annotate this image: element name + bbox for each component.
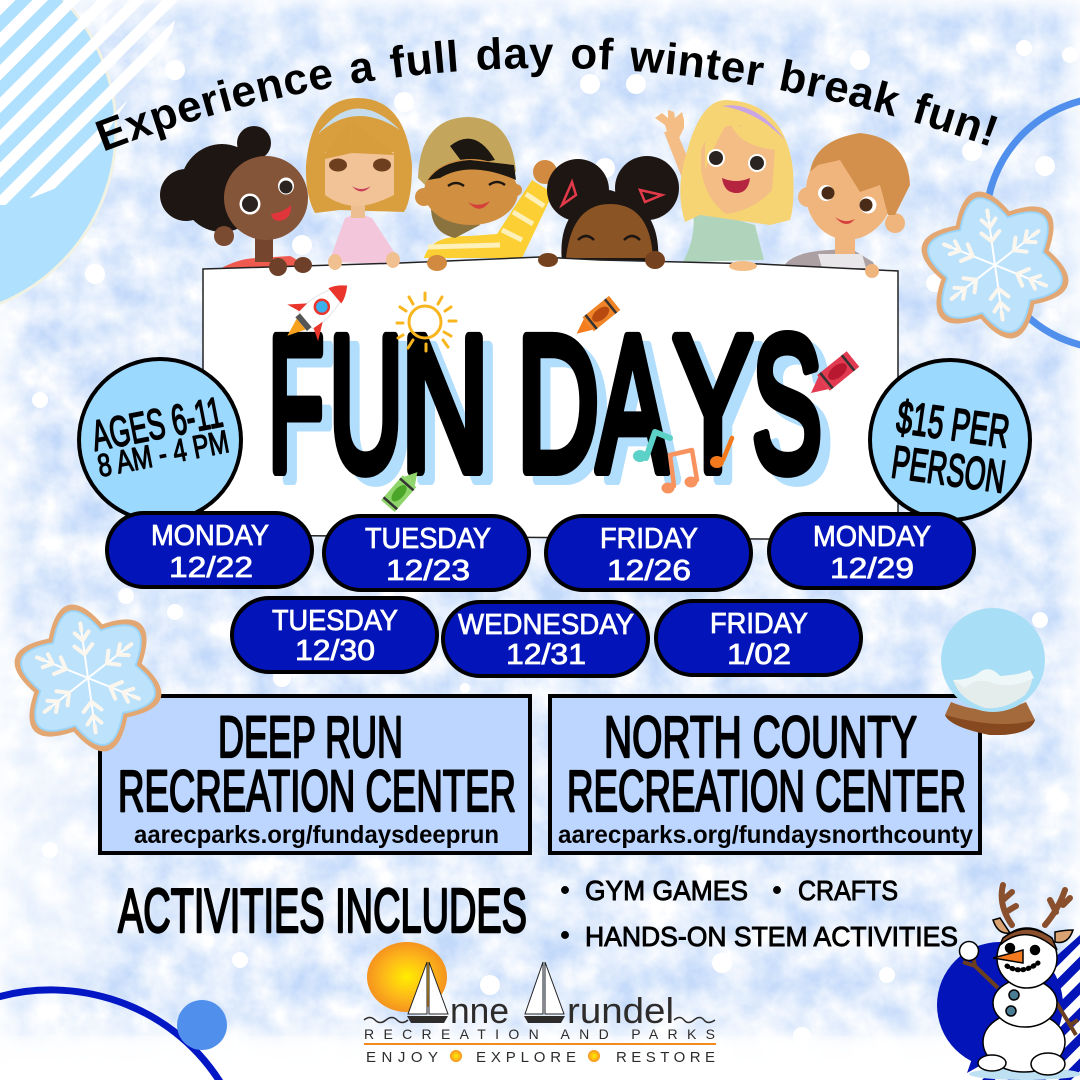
title letters: D — [517, 296, 599, 511]
icon: sun — [397, 293, 456, 351]
pill: Tuesday 12/30 — [232, 598, 437, 672]
decorative corner: top-left circle and stripes — [0, 0, 180, 318]
title shadow: N — [411, 305, 499, 520]
ages badge: AGES 6-11 — [88, 389, 226, 461]
pill: Tuesday 12/23: TUESDAY — [365, 523, 491, 555]
pill: Monday 12/29: MONDAY — [813, 521, 931, 553]
logo: Anne Arundel Recreation and Parks: ENJOY — [366, 1049, 438, 1066]
panel: North County location — [550, 696, 980, 853]
pill: Tuesday 12/30: 12/30 — [295, 635, 375, 667]
title shadow: U — [339, 305, 413, 520]
activities heading: ACTIVITIES INCLUDES — [118, 877, 527, 946]
FUN DAYS title — [268, 296, 832, 520]
price badge: $15 PER — [894, 390, 1013, 458]
pill: Friday 1/02 — [656, 601, 861, 675]
pill: Monday 12/22 — [107, 513, 312, 587]
panel: North County location: NORTH COUNTY — [604, 705, 917, 770]
sign board — [203, 251, 898, 540]
title shadow: A — [607, 305, 678, 520]
kid 4: pigtails peeking — [547, 156, 679, 262]
activities list: HANDS-ON STEM ACTIVITIES — [585, 921, 958, 952]
pill: Monday 12/22: MONDAY — [151, 520, 269, 552]
pill: Friday 12/26: FRIDAY — [600, 523, 698, 555]
logo: Anne Arundel Recreation and Parks: RECREATION AND PARKS — [364, 1026, 715, 1042]
title letters: N — [401, 296, 489, 511]
pill: Tuesday 12/23 — [324, 516, 529, 590]
pill: Tuesday 12/30: TUESDAY — [272, 605, 398, 637]
decorative corner: top-right arc — [986, 97, 1080, 349]
title letters: F — [268, 296, 324, 511]
panel: Deep Run location: RECREATION CENTER — [118, 759, 516, 824]
cookie: right snowflake — [908, 184, 1080, 346]
panel: Deep Run location — [100, 696, 530, 853]
pill: Monday 12/22: 12/22 — [169, 552, 253, 584]
activities list: CRAFTS — [798, 875, 898, 906]
icon: snow globe — [941, 608, 1045, 735]
ages badge: 8 AM - 4 PM — [94, 423, 232, 484]
kid 1: dark skin with buns — [160, 126, 322, 270]
ages badge — [79, 359, 241, 521]
icon: green crayon — [381, 466, 424, 512]
date pills — [107, 513, 974, 676]
icon: red crayon — [805, 351, 859, 401]
kid 5: blonde waving with green top — [655, 100, 794, 262]
cookie: left snowflake — [1, 597, 175, 759]
pill: Monday 12/29 — [769, 514, 974, 588]
pill: Wednesday 12/31: WEDNESDAY — [458, 609, 634, 641]
icon: music notes — [633, 432, 732, 494]
title letters: A — [597, 296, 668, 511]
panel: Deep Run location: DEEP RUN — [218, 705, 403, 770]
pill: Friday 1/02: 1/02 — [727, 639, 791, 671]
title shadow: D — [527, 305, 609, 520]
activities list: GYM GAMES — [585, 875, 748, 906]
pill: Tuesday 12/23: 12/23 — [386, 555, 470, 587]
title letters: S — [752, 296, 822, 511]
title letters: U — [329, 296, 403, 511]
pill: Wednesday 12/31 — [443, 602, 648, 676]
panel: Deep Run location: aarecparks.org/fundaysdeeprun — [134, 821, 499, 849]
pill: Friday 12/26: 12/26 — [607, 555, 691, 587]
decorative corner: bottom-left arc and dot — [0, 990, 227, 1080]
logo: Anne Arundel Recreation and Parks: RESTORE — [616, 1049, 715, 1066]
kid 2: blonde bob with pink top — [306, 98, 412, 264]
title shadow — [278, 305, 832, 520]
icon: orange crayon — [571, 296, 620, 341]
kid 6: boy with brown hair — [783, 132, 910, 272]
decorative corner: bottom-right circle and stripes — [937, 935, 1080, 1080]
title shadow: S — [762, 305, 832, 520]
title letters: Y — [673, 296, 753, 511]
panel: North County location: aarecparks.org/fundaysnorthcounty — [558, 821, 973, 849]
activities list — [562, 875, 958, 952]
pill: Friday 12/26 — [546, 516, 751, 590]
logo: Anne Arundel Recreation and Parks: rundel — [567, 990, 674, 1031]
price badge — [870, 360, 1030, 520]
logo: Anne Arundel Recreation and Parks — [364, 942, 716, 1066]
pill: Monday 12/29: 12/29 — [830, 553, 914, 585]
icon: rocket — [272, 267, 363, 354]
title shadow: F — [278, 305, 334, 520]
logo: Anne Arundel Recreation and Parks: EXPLORE — [476, 1049, 576, 1066]
title shadow: Y — [683, 305, 763, 520]
snowman — [960, 885, 1080, 1080]
pill: Wednesday 12/31: 12/31 — [506, 639, 586, 671]
pill: Friday 1/02: FRIDAY — [710, 608, 808, 640]
title letters — [268, 296, 822, 511]
curved headline: Experience a full day of winter break fun! — [95, 37, 998, 151]
kid 3: backwards cap with yellow stripes — [415, 117, 557, 258]
logo: Anne Arundel Recreation and Parks: nne — [450, 990, 509, 1031]
